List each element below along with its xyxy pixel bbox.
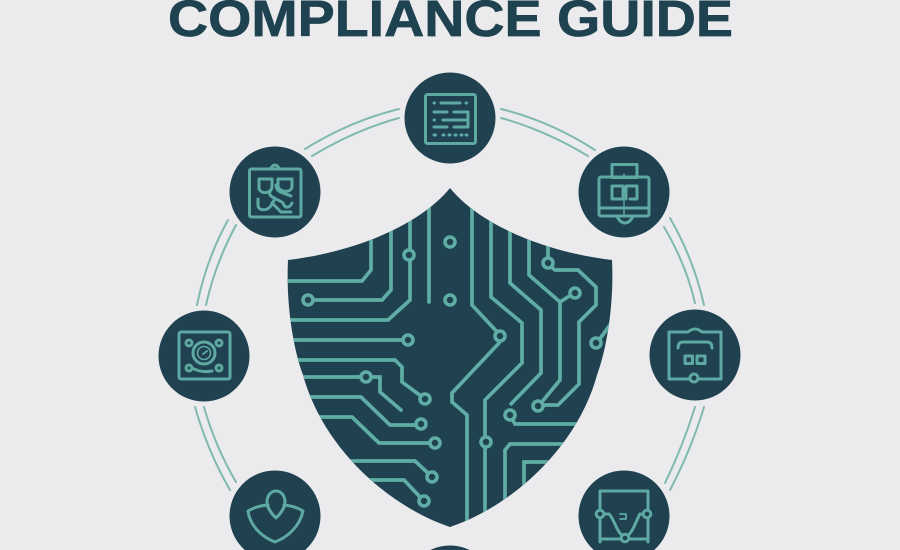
- icon: padlock with open book: [578, 146, 670, 238]
- double ring arcs connecting the icons: [195, 109, 704, 490]
- infographic canvas: [158, 0, 740, 550]
- icon: clipboard with network shapes: [230, 146, 320, 238]
- shield body: [288, 188, 612, 527]
- icon: person shield: [230, 470, 321, 550]
- icon: target dial panel: [158, 310, 250, 402]
- icon circle: bottom, cropped: [430, 546, 470, 550]
- icon: node network panel: [578, 470, 670, 550]
- icon: panel with two squares: [650, 310, 740, 400]
- central shield with circuit traces: [285, 188, 615, 530]
- icon: document checklist: [404, 72, 496, 164]
- circuit traces: [285, 205, 615, 530]
